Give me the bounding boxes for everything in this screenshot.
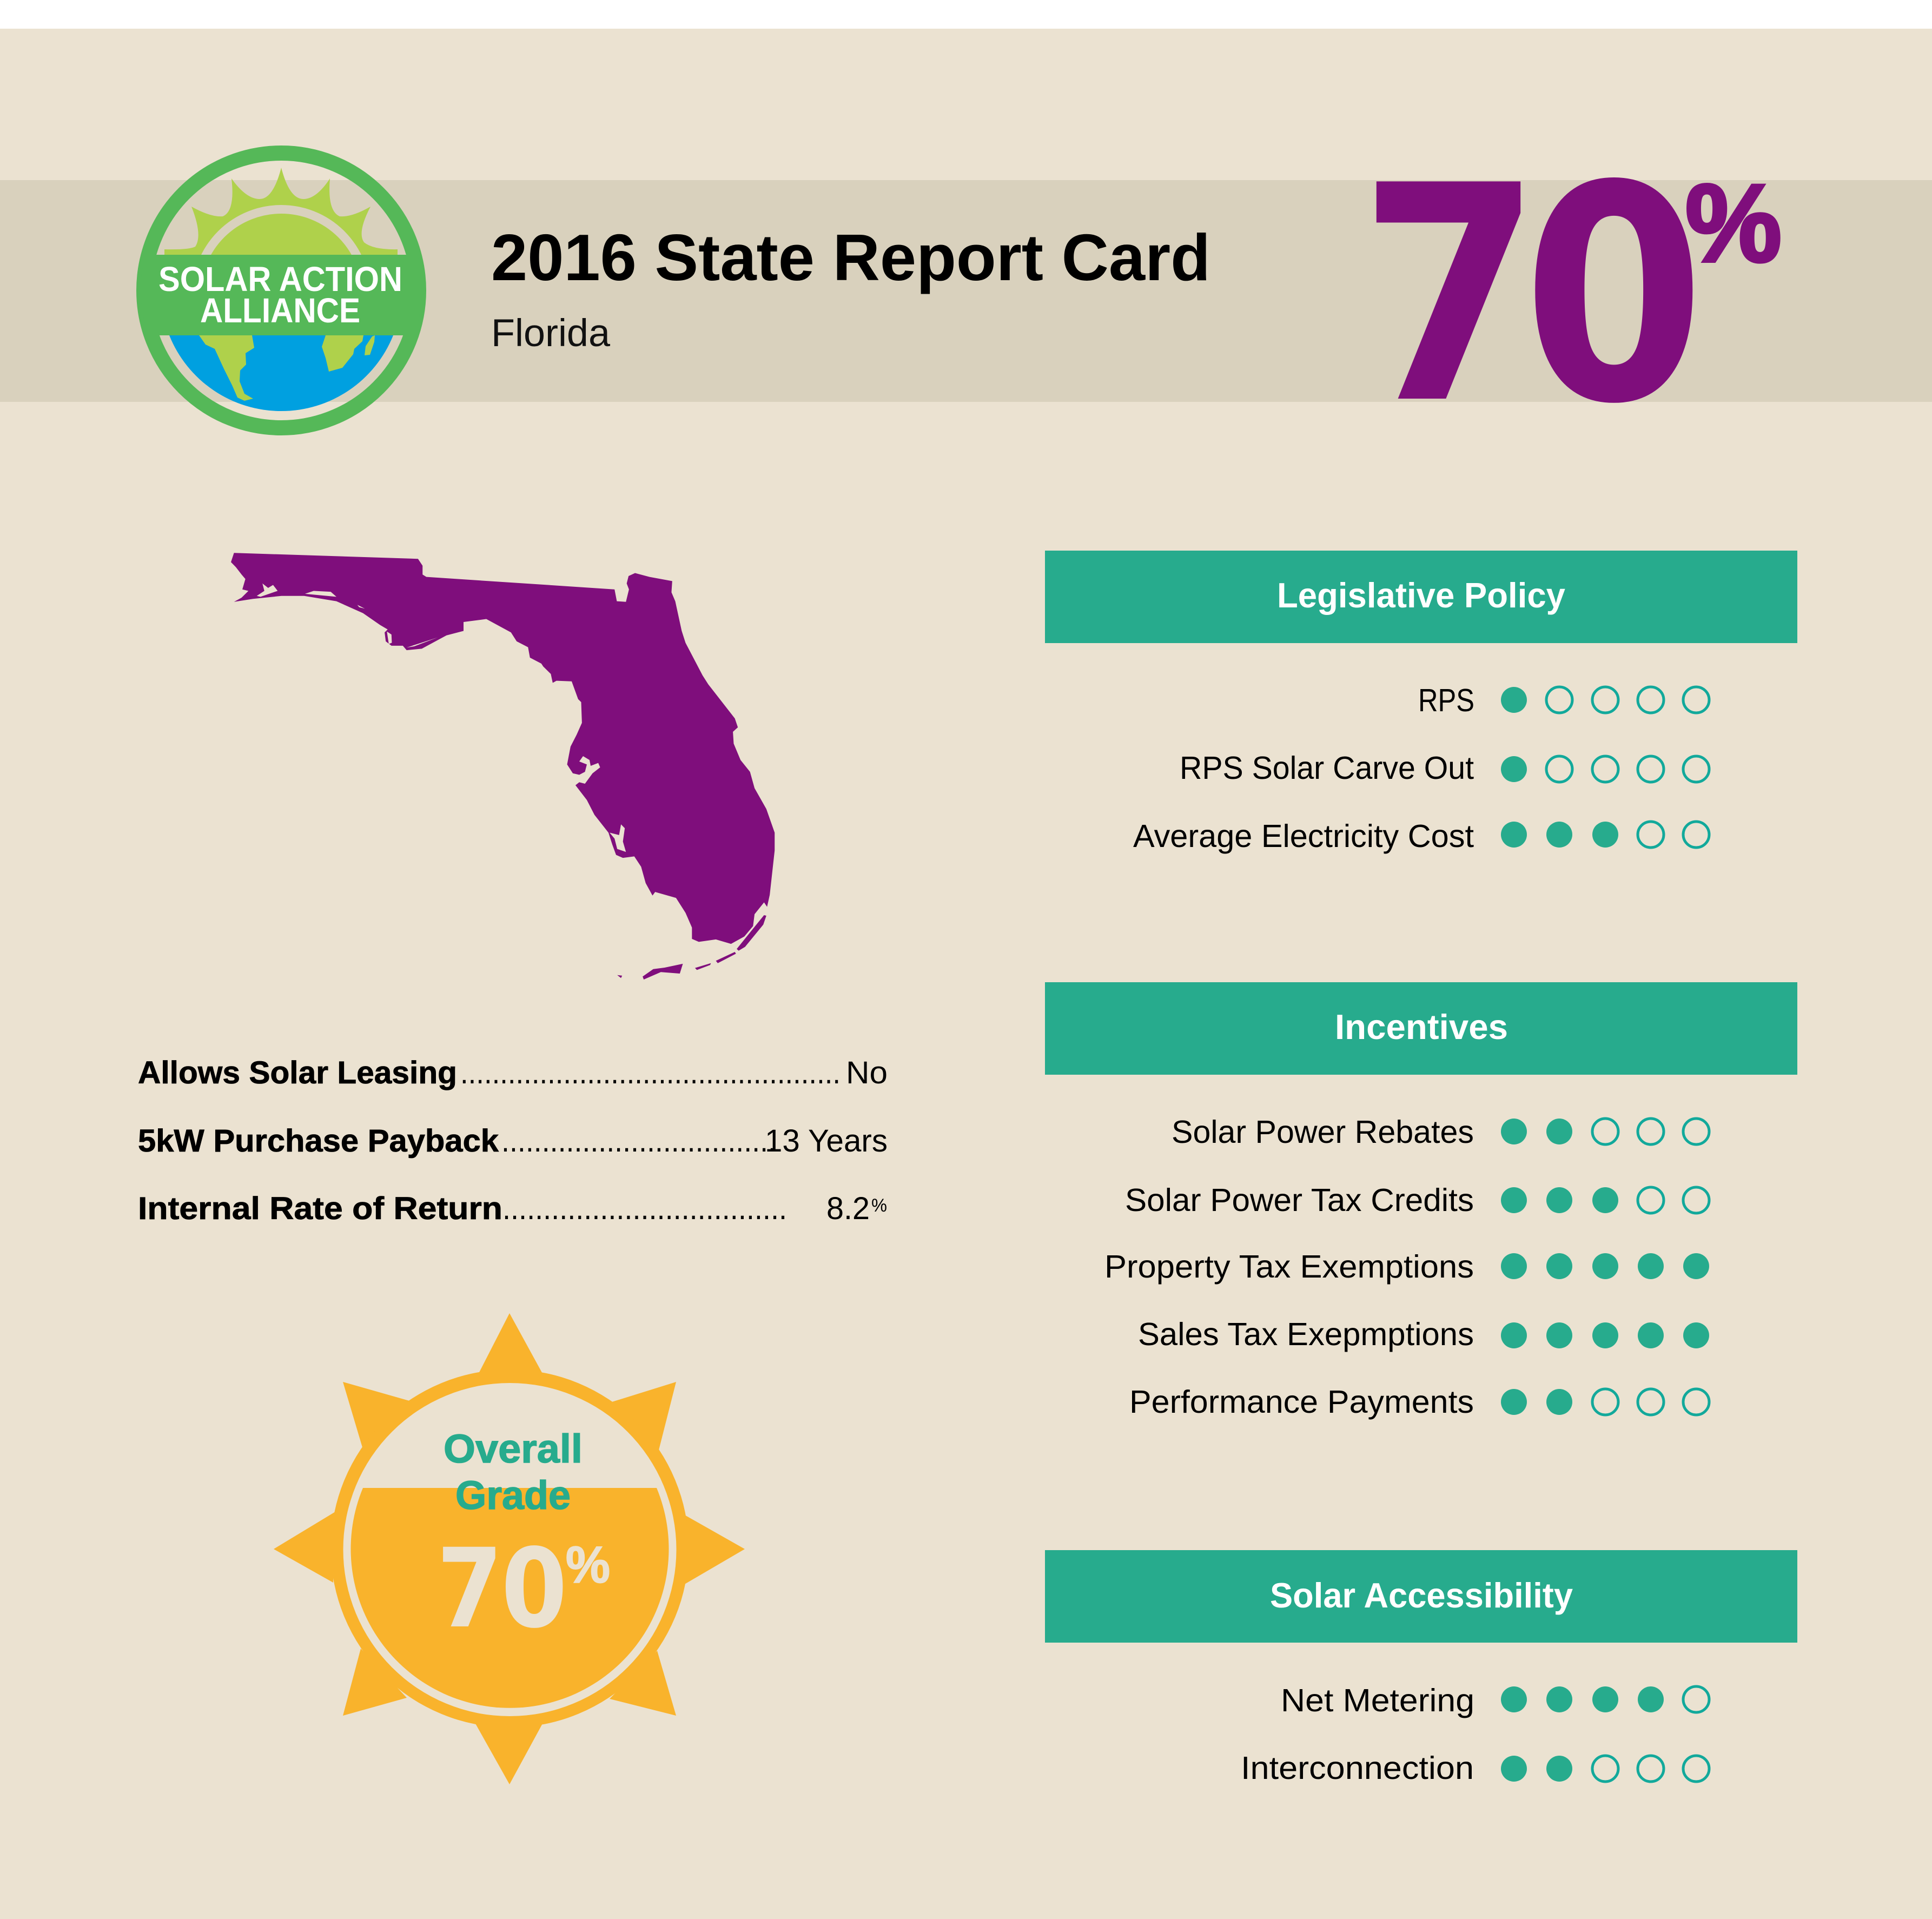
subtitle: state name: Florida — [491, 312, 611, 355]
row: Performance Payments — [1129, 1384, 1709, 1420]
logo earth — [169, 335, 393, 411]
stat: payback: 13 Years — [765, 1123, 888, 1159]
row: Sales Tax Exepmptions — [1138, 1316, 1709, 1352]
row: Sales Tax Exepmptions: Sales Tax Exepmptions — [1138, 1316, 1474, 1352]
stat: solar leasing — [138, 1055, 888, 1090]
heading bar — [1045, 982, 1797, 1075]
row: Solar Power Rebates — [1172, 1114, 1709, 1150]
row: Average Electricity Cost — [1133, 818, 1709, 854]
sun disc — [331, 1369, 689, 1728]
row: Property Tax Exemptions — [1104, 1249, 1709, 1285]
stat: rate of return: 8.2 — [826, 1191, 870, 1226]
row: Property Tax Exemptions: Property Tax Exemptions — [1104, 1249, 1474, 1285]
logo banner — [141, 255, 422, 335]
badge score: 70 — [436, 1525, 567, 1652]
row: RPS — [1418, 683, 1709, 718]
stat: payback: .................................. — [501, 1123, 776, 1159]
sun rays — [274, 1313, 745, 1784]
map: Florida — [231, 553, 775, 980]
badge: overall grade sun — [274, 1313, 745, 1784]
stat: solar leasing: ................................................ — [460, 1055, 841, 1090]
panel: incentives — [1045, 982, 1797, 1420]
header band — [0, 180, 1932, 402]
row: Solar Power Rebates: Solar Power Rebates — [1172, 1114, 1474, 1150]
stat: payback: 5kW Purchase Payback — [138, 1123, 499, 1159]
heading bar: Incentives — [1335, 1007, 1508, 1047]
row: Average Electricity Cost: Average Electricity Cost — [1133, 818, 1474, 854]
heading bar: Solar Accessibility — [1270, 1576, 1573, 1615]
panel: legislative policy — [1045, 551, 1797, 854]
row: RPS Solar Carve Out — [1180, 750, 1709, 786]
row: Interconnection — [1241, 1750, 1709, 1786]
stat: solar leasing: No — [846, 1055, 888, 1090]
heading bar — [1045, 551, 1797, 643]
title: 2016 State Report Card — [491, 221, 1210, 294]
row: RPS Solar Carve Out: RPS Solar Carve Out — [1180, 750, 1474, 786]
stats list — [138, 1055, 888, 1226]
logo: Solar Action Alliance — [141, 153, 422, 428]
stat: rate of return: Internal Rate of Return — [138, 1191, 502, 1226]
stat: rate of return: % — [871, 1195, 887, 1216]
row: Net Metering — [1281, 1683, 1709, 1718]
heading bar: Legislative Policy — [1277, 575, 1565, 615]
big score: 70%: % — [1685, 162, 1782, 285]
stat: solar leasing: Allows Solar Leasing — [138, 1055, 457, 1090]
row: Solar Power Tax Credits — [1125, 1182, 1709, 1218]
badge score: % — [566, 1536, 610, 1594]
row: RPS: RPS — [1418, 683, 1474, 718]
stat: rate of return: ................................... — [502, 1191, 787, 1226]
logo sun — [164, 168, 398, 379]
panel: solar accessibility — [1045, 1550, 1797, 1786]
row: Solar Power Tax Credits: Solar Power Tax Credits — [1125, 1182, 1474, 1218]
stat: rate of return — [138, 1191, 887, 1226]
logo wordmark — [158, 260, 402, 330]
logo ring — [144, 153, 419, 428]
stat: payback — [138, 1123, 888, 1159]
big score: 70%: 70 — [1359, 122, 1705, 469]
heading bar — [1045, 1550, 1797, 1643]
logo wordmark: ALLIANCE — [200, 291, 360, 330]
row: Net Metering: Net Metering — [1281, 1683, 1474, 1718]
badge heading — [444, 1426, 583, 1518]
badge heading: Grade — [455, 1473, 571, 1518]
logo wordmark: SOLAR ACTION — [158, 260, 402, 299]
badge heading: Overall — [444, 1426, 583, 1471]
row: Interconnection: Interconnection — [1241, 1750, 1474, 1786]
row: Performance Payments: Performance Payments — [1129, 1384, 1474, 1420]
